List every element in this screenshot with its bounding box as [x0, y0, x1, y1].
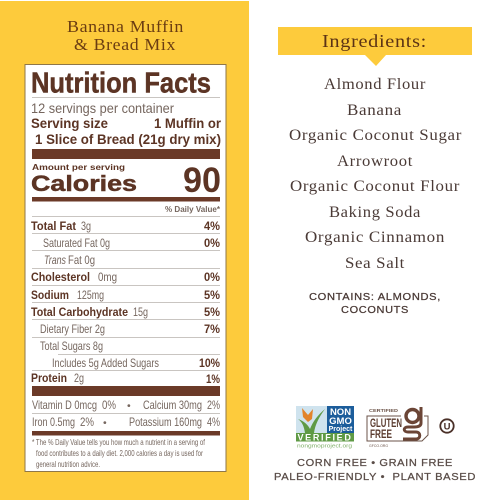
daily value table: 2g [74, 371, 84, 385]
panel: yellow nutrition background [0, 1, 249, 500]
icon: non-GMO verified badge [296, 406, 354, 450]
vitamins and minerals: • [103, 417, 107, 429]
vitamins and minerals: Potassium 160mg [129, 415, 202, 429]
label heading: Nutrition Facts [31, 68, 211, 100]
daily value table: 7% [204, 324, 220, 336]
vitamins and minerals [32, 398, 220, 429]
vitamins and minerals: 2% [207, 398, 220, 412]
ingredients list: Almond Flour [324, 76, 426, 93]
footnote: * The % Daily Value tells you how much a nutrient in a serving of [32, 437, 205, 447]
product title: & Bread Mix [74, 35, 176, 54]
icon: kosher U symbol: U [444, 422, 451, 432]
ingredients list [289, 76, 462, 272]
ingredients banner [278, 27, 472, 66]
vitamins and minerals: Calcium 30mg [143, 398, 202, 412]
daily value table: 1% [206, 374, 220, 386]
icon: certified gluten free badge: FREE [370, 429, 392, 441]
vitamins and minerals: 2% [80, 415, 94, 429]
daily value table: 0% [204, 238, 220, 250]
icon: certified gluten free badge: GLUTEN [370, 418, 402, 430]
allergen note [309, 292, 441, 316]
daily value table: 5% [204, 307, 220, 319]
daily value table: Total Carbohydrate [31, 307, 128, 319]
product title [67, 17, 184, 54]
ingredients list: Organic Coconut Flour [290, 178, 460, 195]
daily value table: Total Sugars 8g [40, 339, 103, 353]
footnote: food contributes to a daily diet. 2,000 calories a day is used for [36, 448, 203, 458]
calories block [31, 161, 221, 200]
daily value table: % Daily Value* [165, 204, 221, 214]
daily value table: Sodium [31, 290, 69, 302]
daily value table: 3g [81, 219, 91, 233]
vitamins and minerals: • [127, 400, 131, 412]
ingredients list: Organic Coconut Sugar [289, 127, 462, 144]
daily value table: 5% [204, 290, 220, 302]
daily value table: 0% [204, 272, 220, 284]
nutrition facts label [25, 64, 226, 472]
vitamins and minerals: 0% [102, 398, 116, 412]
footnote: general nutrition advice. [36, 459, 100, 469]
daily value table: Protein [31, 373, 67, 385]
icon: certified gluten free badge: CERTIFIED [369, 408, 399, 413]
icon: non-GMO verified badge: VERIFIED [297, 432, 353, 442]
vitamins and minerals: 4% [207, 415, 220, 429]
icon: certified gluten free badge [367, 407, 428, 448]
daily value table: Trans [44, 253, 66, 267]
product title: Banana Muffin [67, 17, 184, 36]
daily value table: Includes 5g Added Sugars [52, 356, 159, 370]
daily value table: 125mg [77, 288, 104, 302]
dietary claims [274, 457, 476, 483]
icon: non-GMO verified badge: GMO [329, 416, 352, 427]
daily value table: Saturated Fat 0g [43, 236, 110, 250]
icon: kosher U symbol [440, 419, 454, 433]
allergen note: CONTAINS: ALMONDS, [309, 292, 441, 303]
daily value table: 4% [204, 221, 220, 233]
icon: certified gluten free badge: GFCO.ORG [369, 444, 388, 448]
daily value table: Dietary Fiber 2g [40, 322, 105, 336]
servings block: 12 servings per container [31, 100, 174, 116]
daily value table: 15g [133, 305, 148, 319]
calories block: 90 [183, 161, 221, 200]
icon: non-GMO verified badge: nongmoproject.org [297, 444, 352, 450]
servings block: Serving size [31, 116, 108, 131]
dietary claims: CORN FREE • GRAIN FREE [297, 457, 453, 469]
servings block [31, 100, 222, 147]
vitamins and minerals: Iron 0.5mg [32, 415, 75, 429]
daily value table: Fat 0g [68, 253, 95, 267]
calories block: Amount per serving [32, 162, 125, 172]
servings block: 1 Slice of Bread (21g dry mix) [35, 132, 221, 147]
dietary claims: PALEO-FRIENDLY • PLANT BASED [274, 471, 476, 483]
daily value table: Total Fat [31, 221, 76, 233]
footnote [32, 437, 205, 469]
ingredients banner: Ingredients: [322, 31, 427, 51]
daily value table: 0mg [98, 270, 117, 284]
calories block: Calories [31, 171, 137, 196]
ingredients list: Banana [347, 102, 402, 119]
vitamins and minerals: Vitamin D 0mcg [32, 398, 97, 412]
ingredients list: Organic Cinnamon [305, 229, 445, 246]
ingredients list: Arrowroot [337, 153, 413, 170]
icon: non-GMO verified badge: Project [329, 426, 353, 433]
servings block: 1 Muffin or [154, 116, 222, 131]
ingredients list: Baking Soda [329, 204, 421, 221]
daily value table [31, 204, 221, 386]
ingredients list: Sea Salt [345, 255, 405, 272]
daily value table: 10% [199, 358, 220, 370]
allergen note: COCONUTS [341, 305, 409, 316]
daily value table: Cholesterol [31, 272, 90, 284]
icon: non-GMO verified badge: NON [330, 407, 351, 418]
